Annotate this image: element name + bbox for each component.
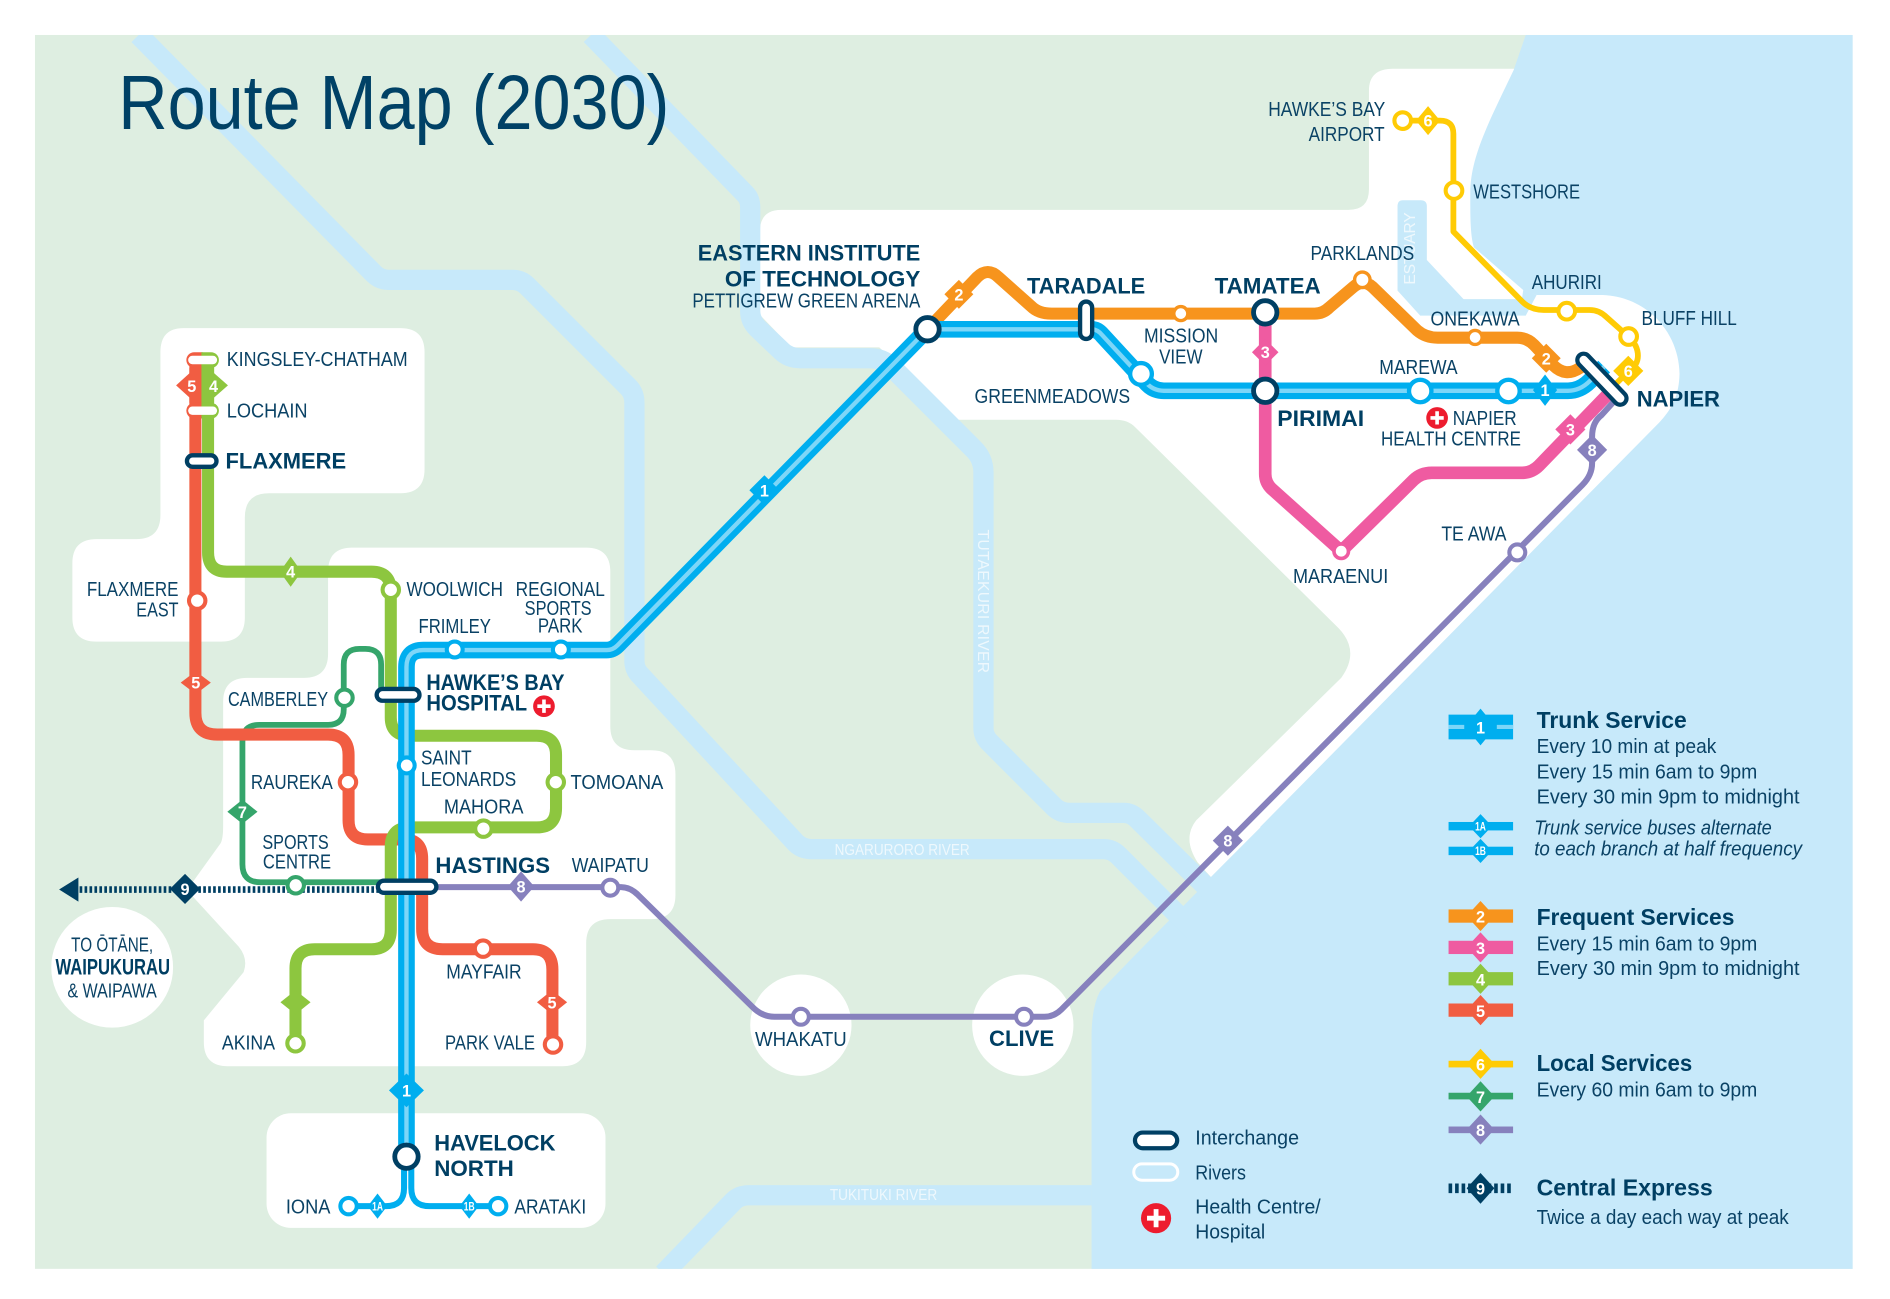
route 1B branch [411,1164,498,1206]
legend: branches 1A and 1B [1449,814,1803,863]
labels: Napier area: HEALTH CENTRE [1381,429,1521,451]
legend: frequent services: 3 [1476,939,1485,958]
route badge 8 Hastings: 8 [517,878,526,897]
legend: health centre: Hospital [1195,1222,1265,1244]
route badge 9: 9 [180,880,190,899]
route badge 7: 7 [238,803,247,822]
interchange: Taradale [1080,302,1092,339]
labels: Hastings south [222,832,649,1055]
stations: blue small [340,642,569,1214]
labels: Flaxmere area [87,349,408,621]
legend: local services: 6 [1476,1055,1485,1074]
legend: frequent services: Every 30 min 9pm to midnight [1537,958,1800,980]
legend: frequent services [1449,901,1800,1025]
route badge 8 Napier [1577,435,1607,465]
river label: Tukituki: TUKITUKI RIVER [830,1187,937,1204]
station: Maraenui [1334,544,1348,558]
legend: branches 1A and 1B: Trunk service buses alternate [1534,818,1772,840]
stations: dark green [288,690,353,893]
stations: light green [287,582,564,1052]
interchange: Hawke's Bay Hospital [377,689,419,701]
river label: Tutaekuri: TUTAEKURI RIVER [974,529,991,673]
legend: frequent services: 2 [1476,908,1485,927]
labels: Flaxmere area: FLAXMERE [226,448,346,473]
labels: Flaxmere area: KINGSLEY-CHATHAM [227,349,408,371]
labels: Hastings north: LEONARDS [421,769,516,791]
icon: Napier health centre [1426,407,1448,429]
route badge 1B [460,1193,479,1219]
legend: local services [1449,1049,1757,1145]
labels: Napier area: MARAENUI [1293,566,1388,588]
route badge 2 Napier: 2 [1542,349,1551,368]
labels: Havelock North: HAVELOCK [434,1131,555,1156]
legend: trunk service: Every 10 min at peak [1537,736,1716,758]
route 7 line [242,649,406,882]
route badge 3 Napier [1555,414,1585,444]
legend: branches 1A and 1B: 1A [1475,819,1486,833]
route badge 2 Taradale: 2 [954,285,963,304]
labels: Napier area: NAPIER [1453,408,1517,430]
route badge 5 [181,671,211,694]
legend: health centre: Health Centre/ [1195,1196,1321,1218]
route 5 line [195,359,552,1045]
legend: frequent services: 5 [1476,1002,1485,1021]
route badge 5 and 4 top: 5 [187,377,196,396]
stations: blue large [1130,363,1520,402]
labels: Napier area: ONEKAWA [1430,309,1520,331]
labels: Hastings south: PARK VALE [445,1033,535,1055]
stop: Lochain [186,403,219,419]
labels: Hastings north: PARK [538,616,583,638]
legend: local services: 7 [1476,1088,1485,1107]
labels: Flaxmere area: LOCHAIN [227,400,308,422]
route badge 3 Tamatea: 3 [1261,343,1270,362]
legend: branches 1A and 1B: 1B [1475,844,1486,858]
route badge 6 Napier: 6 [1624,362,1633,381]
panel: Clive area [972,975,1073,1076]
rivers [139,35,1218,1274]
river label: Ngaruroro: NGARURORO RIVER [835,842,970,859]
labels: Hastings north: SAINT [421,748,472,770]
route badge 3 Tamatea [1252,339,1278,365]
route badge 5 and 4 top: 4 [209,377,219,396]
labels: Hastings north: CAMBERLEY [228,689,328,711]
route badge 5 Park Vale [537,990,567,1014]
labels: Taradale and Tamatea: VIEW [1159,347,1203,369]
labels: Hastings north [228,579,664,819]
labels: Flaxmere area: EAST [136,599,179,621]
stations: orange [1174,272,1482,344]
label: destination: TO ŌTĀNE, [71,934,153,957]
route badge 6 airport [1416,106,1440,135]
legend: trunk service: Every 15 min 6am to 9pm [1537,762,1757,784]
panel: Havelock North area [267,1113,605,1228]
legend: central express: 9 [1476,1180,1485,1199]
route badge 3 Napier: 3 [1566,420,1575,439]
labels: Hastings south: SPORTS [262,832,329,854]
legend: local services: 8 [1476,1121,1485,1140]
panel: Hastings area [187,548,675,1066]
legend: rivers: Rivers [1195,1163,1246,1185]
route badge 5 and 4 top [176,368,228,403]
route badge 1 Napier: 1 [1541,381,1550,400]
labels: Hastings north: HAWKE’S BAY [426,670,565,695]
route badge 6 Napier [1613,356,1643,386]
route badge 8 coast: 8 [1223,832,1232,851]
labels: Havelock North [286,1131,586,1218]
label: destination: & WAIPAWA [68,980,157,1002]
labels: Taradale and Tamatea: PIRIMAI [1277,406,1364,431]
legend: frequent services: Every 15 min 6am to 9pm [1537,933,1757,955]
interchange: Napier [1584,360,1620,398]
route badge 5 Park Vale: 5 [548,993,557,1012]
legend: central express [1449,1173,1789,1229]
route badge 4: 4 [286,563,296,582]
labels: Whakatu and Clive: WHAKATU [755,1029,847,1051]
labels: Napier area: AIRPORT [1309,124,1385,146]
route badge 2 Taradale [944,280,973,309]
labels: Napier area: MAREWA [1379,357,1458,379]
labels: Eastern Institute of Technology: EASTERN INSTITUTE [698,241,920,266]
arrow: to Otane [59,877,78,902]
labels: Whakatu and Clive: CLIVE [989,1026,1054,1051]
panel: Whakatu area [750,975,852,1076]
route badge 1 south: 1 [402,1081,411,1100]
interchange: Flaxmere [187,455,216,467]
labels: Hastings south: HASTINGS [435,853,550,878]
legend: branches 1A and 1B: to each branch at half frequency [1534,839,1803,861]
legend: rivers [1134,1163,1246,1185]
label: destination [55,934,170,1002]
labels: Napier area: PARKLANDS [1310,243,1414,265]
labels: Napier area: NAPIER [1637,386,1720,411]
panel: destination bubble [51,907,173,1028]
legend: trunk service: Every 30 min 9pm to midnight [1537,786,1800,808]
labels: Hastings north: TOMOANA [570,772,664,794]
labels: Taradale and Tamatea [975,273,1364,431]
route badge 1 diagonal: 1 [760,481,769,500]
route badge 7 [227,800,258,824]
labels: Eastern Institute of Technology [692,241,921,313]
labels: Hastings north: WOOLWICH [406,579,503,601]
icon: hospital cross [533,695,555,717]
stations: yellow [1394,112,1637,345]
route 2 line [928,272,1592,372]
legend: local services: Local Services [1537,1050,1692,1076]
route 6 line [1403,121,1638,386]
route badge 1A: 1A [372,1199,383,1213]
labels: Whakatu and Clive [755,1026,1054,1051]
labels: Eastern Institute of Technology: PETTIGREW GREEN ARENA [692,291,921,313]
route badge 8 Hastings [508,871,534,902]
legend: frequent services: Frequent Services [1537,904,1734,930]
route badge 1A [368,1193,387,1219]
urban area tip over rivers [1190,790,1260,877]
route 9 express dotted line [59,877,406,902]
labels: Hastings south: CENTRE [263,851,331,873]
labels: Napier area: TE AWA [1441,524,1507,546]
route 1A branch [349,1164,404,1206]
interchange: Napier inner [1584,360,1620,398]
route badge 5: 5 [191,674,200,693]
route badge 1 south [389,1073,424,1107]
legend: interchange: Interchange [1195,1128,1299,1150]
labels: Havelock North: IONA [286,1196,331,1218]
legend: health centre [1141,1196,1321,1244]
route badge 8 coast [1213,826,1243,856]
route badge 8 Napier: 8 [1588,441,1597,460]
legend: trunk service: Trunk Service [1537,707,1687,733]
legend: central express: Central Express [1537,1174,1713,1200]
labels: Eastern Institute of Technology: OF TECHNOLOGY [725,266,920,291]
estuary [1398,200,1537,316]
labels: Napier area: HAWKE’S BAY [1268,99,1385,121]
label: destination: WAIPUKURAU [55,955,170,980]
labels: Hastings north: SPORTS [525,598,592,620]
route badge 6 airport: 6 [1424,112,1433,131]
legend: central express: Twice a day each way at peak [1537,1207,1789,1229]
legend: trunk service: 1 [1476,718,1485,737]
labels: Napier area: BLUFF HILL [1642,308,1737,330]
route badge 2 Napier [1532,344,1561,373]
labels: Napier area: WESTSHORE [1473,181,1580,203]
legend: frequent services: 4 [1476,970,1486,989]
labels: Hastings north: HOSPITAL [426,690,527,715]
route badge 1 diagonal [749,475,780,505]
major stations [395,301,1277,1168]
labels: Hastings south: AKINA [222,1033,276,1055]
labels: Napier area [1268,99,1737,588]
labels: Napier area: AHURIRI [1532,272,1602,294]
urban area: Napier and Taradale [760,69,1713,887]
route 1 trunk line [406,329,1604,1158]
labels: Taradale and Tamatea: TARADALE [1027,273,1145,298]
route badge 4 [280,557,302,587]
route badge 1 Napier [1533,375,1557,406]
route badge 4 Akina [280,990,311,1014]
labels: Hastings north: FRIMLEY [419,616,491,638]
route 8 line [406,402,1614,1017]
labels: Havelock North: NORTH [434,1156,514,1181]
route 3 line [1265,312,1609,551]
route 4 line [208,359,556,1043]
labels: Hastings north: REGIONAL [516,579,605,601]
sea [1092,35,1853,1269]
title: Route Map (2030) [118,60,669,146]
labels: Hastings south: MAYFAIR [446,962,522,984]
stations: purple [602,544,1525,1025]
labels: Hastings north: RAUREKA [251,772,334,794]
stations: red [189,592,561,1053]
route badge 9 [170,874,200,904]
river label: Estuary: ESTUARY [1402,212,1419,285]
labels: Hastings south: WAIPATU [572,855,649,877]
labels: Havelock North: ARATAKI [514,1196,586,1218]
panel: Flaxmere area [72,328,425,642]
labels: Hastings north: MAHORA [444,797,524,819]
route badge 1B: 1B [464,1199,475,1213]
labels: Flaxmere area: FLAXMERE [87,579,179,601]
legend: local services: Every 60 min 6am to 9pm [1537,1079,1757,1101]
labels: Taradale and Tamatea: TAMATEA [1215,273,1321,298]
interchange: Hastings [378,881,436,893]
legend: trunk service [1449,707,1800,808]
labels: Taradale and Tamatea: MISSION [1144,326,1218,348]
stop: Kingsley-Chatham [186,352,219,368]
legend: interchange [1135,1128,1299,1150]
labels: Taradale and Tamatea: GREENMEADOWS [975,386,1130,408]
